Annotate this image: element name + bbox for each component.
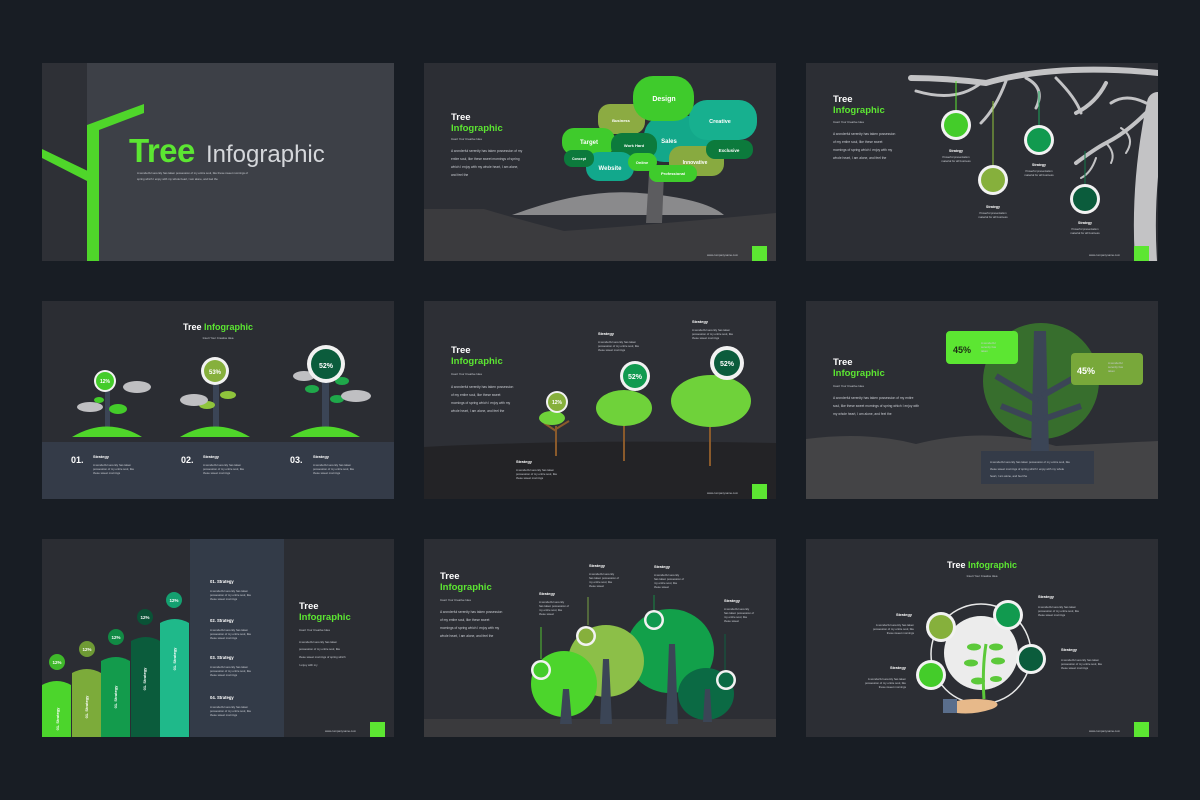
- icon: green tree lines: [42, 104, 144, 261]
- strategy labels: these sweet: [589, 584, 604, 588]
- text block: [440, 610, 502, 638]
- title: [833, 357, 885, 388]
- footer: www.companyname.com: [1089, 729, 1121, 733]
- strategy items: possession of my entire soul, like: [313, 467, 354, 471]
- slide 9: hand with sprout: [806, 539, 1158, 737]
- strategy labels: Strategy: [724, 598, 741, 603]
- strategy labels: A wonderful serenity has taken: [516, 468, 555, 472]
- strategy labels: these sweet: [539, 612, 554, 616]
- title: Infographic: [833, 368, 885, 379]
- strategy labels: these sweet: [654, 585, 669, 589]
- callout: 45% olive: taken: [1108, 369, 1115, 373]
- callout: 45% green: taken: [981, 349, 988, 353]
- strategy labels: my entire soul, like: [589, 580, 613, 584]
- text block: A wonderful serenity has taken possession of my entire soul, like these sweet mornings of: [137, 171, 248, 175]
- strategy list: these sweet mornings: [210, 673, 238, 677]
- strategy labels: Strategy: [692, 319, 709, 324]
- title: Tree Infographic: [183, 322, 253, 332]
- title: [451, 112, 503, 141]
- strategy list: 03. Strategy: [210, 655, 234, 660]
- branch: [911, 70, 1158, 261]
- strategy labels: possession of my entire soul, like: [873, 627, 914, 631]
- bottom text box: [981, 451, 1094, 484]
- title: [183, 322, 253, 340]
- strategy list: 02. Strategy: [210, 618, 234, 623]
- callout: 45% olive: serenity has: [1108, 365, 1124, 369]
- strategy items: possession of my entire soul, like: [203, 467, 244, 471]
- strategy labels: has taken possession of: [654, 577, 684, 581]
- labels: [941, 149, 1100, 235]
- text block: entire soul, like these sweet mornings of spring: [451, 157, 520, 161]
- icons: [916, 600, 1046, 690]
- percentage circles: 52%: [319, 363, 334, 370]
- percentage circles: 12%: [552, 400, 563, 406]
- strategy list: 04. Strategy: [210, 695, 234, 700]
- title: [451, 345, 503, 376]
- title: Insert Your Creative Idea: [440, 598, 471, 602]
- strategy labels: possession of my entire soul, like: [865, 681, 906, 685]
- title: I enjoy with my: [299, 663, 318, 667]
- slide 1: title cover: [42, 63, 394, 261]
- bars: 12%: [169, 598, 179, 603]
- title: Tree Infographic: [947, 560, 1017, 570]
- icons on stems: [531, 595, 736, 690]
- strategy labels: A wonderful serenity has taken: [868, 677, 906, 681]
- bubble tree: Design: [652, 96, 676, 103]
- icon: hand: [943, 699, 998, 714]
- title: [947, 560, 1017, 578]
- slide 6: leaf tree with callouts: [806, 301, 1158, 499]
- strategy labels: A wonderful serenity has taken: [692, 328, 731, 332]
- bars: 01. Strategy: [172, 647, 177, 670]
- title: Insert Your Creative Idea: [833, 120, 864, 124]
- strategy labels: my entire soul, like: [724, 615, 748, 619]
- labels: Strategy: [986, 205, 1000, 209]
- strategy labels: Strategy: [598, 331, 615, 336]
- text block: whole heart, I am alone, and feel the: [451, 409, 505, 413]
- bars: 12%: [52, 660, 62, 665]
- strategy labels: these sweet mornings: [1038, 613, 1066, 617]
- percentage circles: 52%: [720, 361, 735, 368]
- text block: A wonderful serenity has taken possession of my entire: [833, 396, 914, 400]
- strategy labels: these sweet mornings: [692, 336, 720, 340]
- strategy list: possession of my entire soul, like: [210, 632, 251, 636]
- text block: [451, 149, 523, 177]
- strategy list: possession of my entire soul, like: [210, 669, 251, 673]
- strategy items: 02.: [181, 455, 194, 465]
- strategy labels: my entire soul, like: [539, 608, 563, 612]
- title: Insert Your Creative Idea: [451, 137, 482, 141]
- bars: 01. Strategy: [142, 667, 147, 690]
- title: Infographic: [440, 582, 492, 593]
- tree: [983, 323, 1099, 453]
- strategy list: A wonderful serenity has taken: [210, 628, 249, 632]
- text block: mornings of spring which I enjoy with my: [451, 401, 511, 405]
- title: [440, 571, 492, 602]
- strategy labels: Strategy: [589, 563, 606, 568]
- title: Tree: [833, 357, 853, 368]
- title: Insert Your Creative Idea: [833, 384, 864, 388]
- title: these sweet mornings of spring which: [299, 655, 346, 659]
- labels: Powerful presentation: [979, 211, 1007, 215]
- percentage circles: [94, 345, 345, 392]
- strategy labels: Strategy: [1038, 594, 1055, 599]
- title: Tree: [833, 94, 853, 105]
- bars: 01. Strategy: [84, 695, 89, 718]
- strategy labels: Strategy: [896, 612, 913, 617]
- labels: Strategy: [949, 149, 963, 153]
- strategy labels: A wonderful serenity has taken: [1038, 605, 1077, 609]
- text block: A wonderful serenity has taken possession: [451, 385, 513, 389]
- bubble tree: Concept: [572, 157, 587, 161]
- text block: which I enjoy with my whole heart, I am alone,: [451, 165, 518, 169]
- percentage circles: 12%: [100, 379, 111, 385]
- strategy items: [71, 454, 354, 475]
- footer: www.companyname.com: [707, 253, 739, 257]
- strategy labels: A wonderful serenity: [589, 572, 615, 576]
- footer: [707, 484, 767, 499]
- labels: material for all business: [978, 215, 1008, 219]
- callout: 45% green: A wonderful: [981, 341, 996, 345]
- plants: [72, 371, 371, 437]
- title: Infographic: [299, 612, 351, 623]
- strategy labels: possession of my entire soul, like: [1038, 609, 1079, 613]
- strategy labels: has taken possession of: [589, 576, 619, 580]
- footer: www.companyname.com: [1089, 253, 1121, 257]
- strategy labels: Strategy: [1061, 647, 1078, 652]
- title: Insert Your Creative Idea: [299, 628, 330, 632]
- strategy labels: has taken possession of: [724, 611, 754, 615]
- strategy labels: Strategy: [516, 459, 533, 464]
- text block: spring which I enjoy with my whole heart, I am alone, and feel the: [137, 177, 218, 181]
- bubble tree: Sales: [661, 139, 677, 145]
- text block: A wonderful serenity has taken possession: [440, 610, 502, 614]
- title: Infographic: [833, 105, 885, 116]
- strategy labels: possession of my entire soul, like: [1061, 662, 1102, 666]
- bars: [42, 592, 189, 737]
- footer: www.companyname.com: [325, 729, 357, 733]
- text block: of my entire soul, like these sweet: [833, 140, 883, 144]
- slide 5: three trees growth: [424, 301, 776, 499]
- text block: of my entire soul, like these sweet: [440, 618, 490, 622]
- text block: whole heart, I am alone, and feel the: [440, 634, 494, 638]
- footer: [325, 722, 385, 737]
- bottom text box: these sweet mornings of spring which I enjoy with my whole: [990, 467, 1064, 471]
- callout: 45% olive: [1071, 353, 1143, 385]
- strategy labels: my entire soul, like: [654, 581, 678, 585]
- strategy labels: [516, 319, 733, 480]
- text block: of my entire soul, like these sweet: [451, 393, 501, 397]
- strategy items: A wonderful serenity has taken: [313, 463, 352, 467]
- strategy labels: A wonderful serenity: [654, 573, 680, 577]
- title: Insert Your Creative Idea: [967, 574, 998, 578]
- strategy list: possession of my entire soul, like: [210, 709, 251, 713]
- strategy items: these sweet mornings: [313, 471, 341, 475]
- percentage circles: [546, 346, 744, 413]
- bubble tree: Target: [580, 140, 598, 146]
- strategy labels: these sweet mornings: [879, 685, 907, 689]
- title: Infographic: [451, 356, 503, 367]
- strategy items: possession of my entire soul, like: [93, 467, 134, 471]
- strategy list: these sweet mornings: [210, 597, 238, 601]
- text block: my whole heart, I am alone, and feel the: [833, 412, 892, 416]
- strategy items: A wonderful serenity has taken: [203, 463, 242, 467]
- strategy items: these sweet mornings: [203, 471, 231, 475]
- bubble tree: Work Hard: [624, 143, 645, 148]
- labels: Strategy: [1032, 163, 1046, 167]
- title: Insert Your Creative Idea: [203, 336, 234, 340]
- trees: [544, 376, 739, 466]
- callout: 45% green: [946, 331, 1018, 364]
- labels: Powerful presentation: [942, 155, 970, 159]
- labels: material for all business: [1070, 231, 1100, 235]
- title: Tree: [299, 601, 319, 612]
- bubble tree: Online: [636, 160, 649, 165]
- strategy labels: these sweet: [724, 619, 739, 623]
- title: possession of my entire soul, like: [299, 647, 340, 651]
- slide 8: forest: [424, 539, 776, 737]
- strategy labels: A wonderful serenity has taken: [876, 623, 914, 627]
- strategy list: these sweet mornings: [210, 636, 238, 640]
- callout: 45% green: 45%: [953, 345, 971, 355]
- text block: A wonderful serenity has taken possession: [833, 132, 895, 136]
- bars: 12%: [140, 615, 150, 620]
- bars: 12%: [82, 647, 92, 652]
- bars: 01. Strategy: [113, 685, 118, 708]
- strategy labels: Strategy: [539, 591, 556, 596]
- strategy labels: A wonderful serenity has taken: [598, 340, 637, 344]
- title: Tree: [451, 112, 471, 123]
- strategy labels: possession of my entire soul, like: [692, 332, 733, 336]
- trees: [531, 609, 734, 724]
- title: Tree: [129, 132, 195, 169]
- callout: 45% olive: A wonderful: [1108, 361, 1123, 365]
- strategy items: these sweet mornings: [93, 471, 121, 475]
- percentage circles: 53%: [209, 370, 222, 376]
- strategy list: A wonderful serenity has taken: [210, 705, 249, 709]
- bubble tree: Professional: [661, 171, 685, 176]
- strategy labels: A wonderful serenity: [724, 607, 750, 611]
- strategy items: Strategy: [203, 454, 220, 459]
- strategy items: 01.: [71, 455, 84, 465]
- strategy labels: Strategy: [654, 564, 671, 569]
- strategy labels: Strategy: [890, 665, 907, 670]
- bottom text box: A wonderful serenity has taken possession of my entire soul, like: [990, 460, 1070, 464]
- bottom text box: heart, I am alone, and feel the: [990, 474, 1028, 478]
- title: Infographic: [206, 141, 325, 168]
- strategy items: A wonderful serenity has taken: [93, 463, 132, 467]
- strategy list: 01. Strategy: [210, 579, 234, 584]
- ring and circle: [931, 604, 1031, 704]
- strategy labels: these sweet mornings: [887, 631, 915, 635]
- title: A wonderful serenity has taken: [299, 640, 338, 644]
- strategy labels: [539, 563, 754, 623]
- text block: [451, 385, 513, 413]
- strategy labels: [865, 594, 1102, 689]
- labels: Strategy: [1078, 221, 1092, 225]
- bubble tree: Website: [599, 166, 622, 172]
- labels: material for all business: [941, 159, 971, 163]
- footer: www.companyname.com: [707, 491, 739, 495]
- strategy list: A wonderful serenity has taken: [210, 665, 249, 669]
- tree trunk: [646, 173, 664, 223]
- strategy labels: these sweet mornings: [1061, 666, 1089, 670]
- strategy labels: possession of my entire soul, like: [598, 344, 639, 348]
- labels: material for all business: [1024, 173, 1054, 177]
- footer: [707, 246, 767, 261]
- strategy list: these sweet mornings: [210, 713, 238, 717]
- percentage circles: 52%: [628, 374, 643, 381]
- text block: [833, 396, 919, 416]
- strategy items: 03.: [290, 455, 303, 465]
- strategy labels: has taken possession of: [539, 604, 569, 608]
- bars: 01. Strategy: [55, 707, 60, 730]
- callout: 45% olive: 45%: [1077, 366, 1095, 376]
- text block: [137, 171, 248, 181]
- strategy list: [210, 579, 251, 717]
- text block: mornings of spring which I enjoy with my: [440, 626, 500, 630]
- strategy labels: A wonderful serenity: [539, 600, 565, 604]
- footer: [1089, 246, 1149, 261]
- labels: Powerful presentation: [1025, 169, 1053, 173]
- strategy labels: possession of my entire soul, like: [516, 472, 557, 476]
- bubble tree: Exclusive: [719, 148, 740, 153]
- title: Tree: [451, 345, 471, 356]
- title: [833, 94, 885, 124]
- strategy items: Strategy: [313, 454, 330, 459]
- labels: Powerful presentation: [1071, 227, 1099, 231]
- hanging icons: [941, 81, 1100, 214]
- text block: [833, 132, 895, 160]
- strategy labels: these sweet mornings: [598, 348, 626, 352]
- text block: and feel the: [451, 173, 468, 177]
- strategy list: A wonderful serenity has taken: [210, 589, 249, 593]
- bubble tree: Creative: [709, 119, 731, 125]
- slide 7: bar trees: [42, 539, 394, 737]
- slide 4: growing plants: [42, 301, 394, 499]
- title: Tree: [440, 571, 460, 582]
- strategy labels: these sweet mornings: [516, 476, 544, 480]
- strategy list: possession of my entire soul, like: [210, 593, 251, 597]
- strategy labels: A wonderful serenity has taken: [1061, 658, 1100, 662]
- strategy items: Strategy: [93, 454, 110, 459]
- footer: [1089, 722, 1149, 737]
- title: [299, 601, 351, 667]
- text block: A wonderful serenity has taken possession of my: [451, 149, 523, 153]
- bubble tree: Business: [612, 118, 631, 123]
- title: Infographic: [451, 123, 503, 134]
- slide 3: hanging branch: [806, 63, 1158, 261]
- bubble tree: [562, 76, 757, 182]
- text block: mornings of spring which I enjoy with my: [833, 148, 893, 152]
- bars: 12%: [111, 635, 121, 640]
- title: [129, 132, 325, 169]
- bubble tree: Innovative: [683, 160, 708, 166]
- text block: whole heart, I am alone, and feel the: [833, 156, 887, 160]
- callout: 45% green: serenity has: [981, 345, 997, 349]
- title: Insert Your Creative Idea: [451, 372, 482, 376]
- text block: soul, like these sweet mornings of spring which I enjoy with: [833, 404, 919, 408]
- slide 2: bubble tree: [424, 63, 776, 261]
